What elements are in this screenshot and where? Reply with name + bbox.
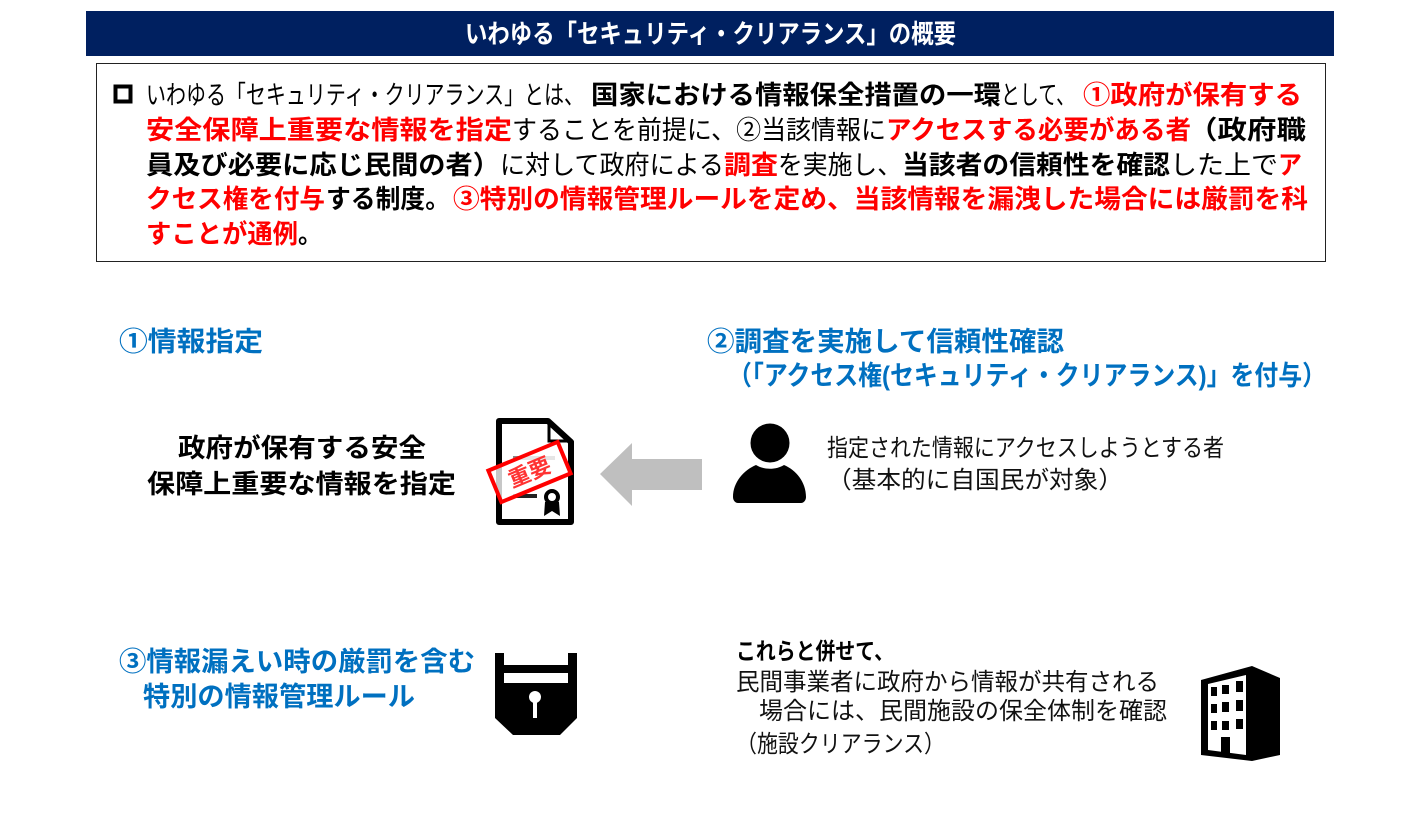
definition text: することを前提に、②当該情報に	[512, 115, 886, 145]
definition text: を実施し、	[778, 150, 902, 180]
definition text: する制度。	[326, 184, 450, 214]
definition text: ①政府が保有する	[1083, 80, 1302, 110]
definition text: 。	[298, 219, 322, 249]
text: person seeking access	[827, 435, 1224, 494]
text: government designates important information: 保障上重要な情報を指定	[147, 469, 456, 499]
definition text: 員及び必要に応じ民間の者）	[146, 150, 500, 180]
definition text: 当該者の信頼性を確認	[902, 150, 1170, 180]
text: facility clearance: （施設クリアランス）	[736, 731, 945, 758]
definition text: 国家における情報保全措置の一環	[591, 80, 1001, 110]
icon: important document with certificate seal: 重要	[505, 452, 555, 492]
arrow: pointing left	[600, 443, 702, 506]
heading: 1 information designation: ①情報指定	[119, 327, 263, 357]
title banner: いわゆる「セキュリティ・クリアランス」の概要	[465, 19, 956, 49]
definition text: いわゆる「セキュリティ・クリアランス」とは、	[146, 80, 584, 110]
text: person seeking access: 指定された情報にアクセスしようとする者	[827, 435, 1224, 462]
definition text: 調査	[724, 150, 778, 180]
icon: important document with certificate seal	[488, 421, 571, 522]
definition text: した上で	[1170, 150, 1278, 180]
icon: office building	[1201, 666, 1280, 761]
text: facility clearance: 場合には、民間施設の保全体制を確認	[759, 698, 1167, 725]
bullet square	[116, 86, 130, 102]
text: facility clearance: これらと併せて、	[736, 638, 894, 664]
definition text	[146, 80, 1308, 249]
definition text: アクセスする必要がある者	[886, 115, 1191, 145]
definition text: すことが通例	[146, 219, 298, 249]
definition text: ③特別の情報管理ルールを定め、当該情報を漏洩した場合には厳罰を科	[453, 184, 1308, 214]
heading: 3 penalties and management rules	[119, 647, 475, 712]
heading: 2 investigation and clearance: （「アクセス権(セキュリティ・クリアランス)」を付与）	[728, 361, 1326, 391]
text: government designates important information: 政府が保有する安全	[178, 433, 426, 463]
text: facility clearance: 民間事業者に政府から情報が共有される	[736, 669, 1159, 696]
heading: 2 investigation and clearance: ②調査を実施して信頼性確認	[707, 327, 1064, 357]
text: facility clearance	[736, 638, 1167, 758]
title banner	[86, 11, 1334, 56]
text: person seeking access: （基本的に自国民が対象）	[827, 467, 1123, 494]
definition text: （政府職	[1188, 115, 1306, 145]
definition text: として、	[1001, 80, 1075, 110]
definition text: に対して政府による	[500, 150, 724, 180]
definition text: 安全保障上重要な情報を指定	[146, 115, 512, 145]
icon: person	[733, 424, 806, 503]
heading: 2 investigation and clearance	[707, 327, 1326, 391]
icon: lock with keyhole	[495, 653, 577, 735]
definition text: ア	[1278, 150, 1302, 180]
definition box	[96, 64, 1326, 262]
definition text: クセス権を付与	[146, 184, 325, 214]
heading: 3 penalties and management rules: 特別の情報管理ルール	[143, 682, 415, 712]
heading: 3 penalties and management rules: ③情報漏えい時の厳罰を含む	[119, 647, 475, 677]
text: government designates important information	[147, 433, 456, 499]
